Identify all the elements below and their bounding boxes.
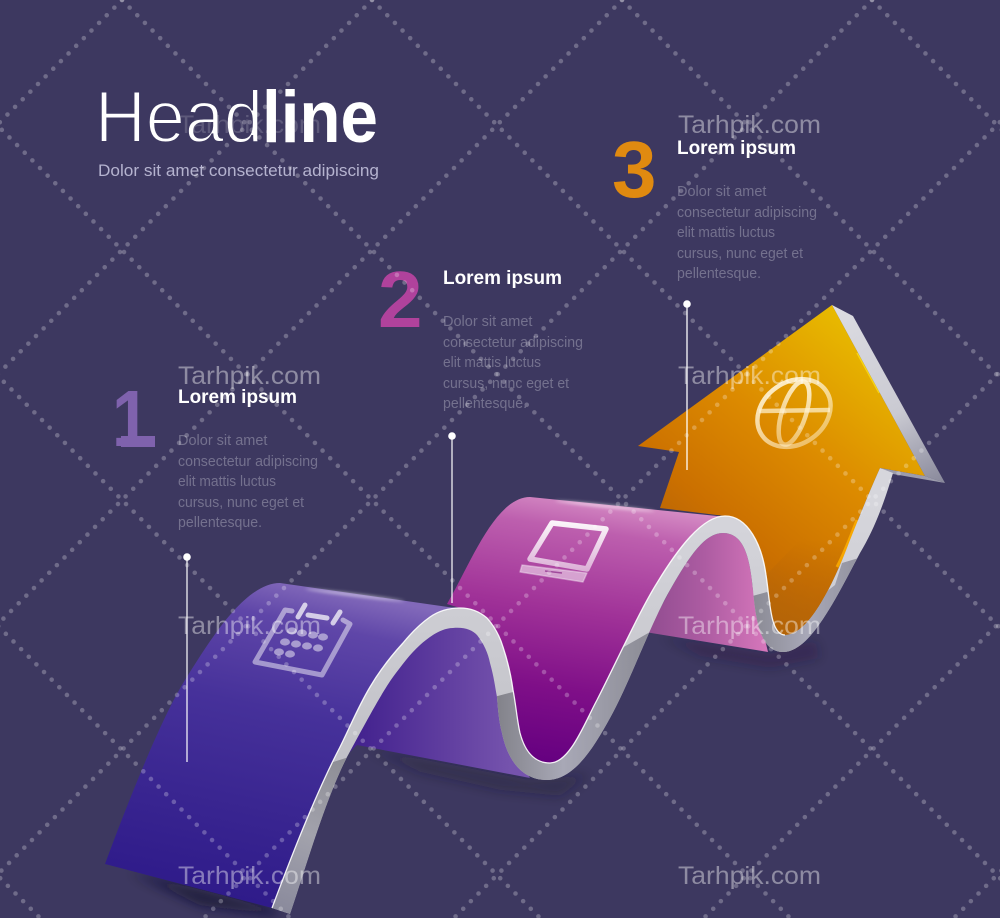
highlight on ribbon 1 [305,587,405,603]
step 1 body: Dolor sit amet [178,433,267,449]
title: Head [95,77,263,158]
step 2 body: elit mattis luctus [443,355,541,371]
leader line 1 [183,553,191,762]
number 1: 1 [112,374,150,463]
title: line [262,77,378,158]
panel: purple-magenta ribbon [447,497,725,763]
number 3: 3 [612,125,656,214]
watermarks: Tarhpik.com [678,362,821,390]
step 3 body: elit mattis luctus [677,225,775,241]
step 1 heading: Lorem ipsum [178,387,297,408]
step 3 heading: Lorem ipsum [677,138,796,159]
subtitle: Dolor sit amet consectetur adipiscing [98,161,379,180]
panel: blue ribbon [105,583,460,908]
number 2: 2 [378,255,422,344]
step 2 heading: Lorem ipsum [443,268,562,289]
step 1 text block [112,374,322,531]
silver ribbon edge [250,460,910,918]
step 1 body: consectetur adipiscing [178,454,318,470]
title [95,77,378,158]
step 3 body: cursus, nunc eget et [677,246,803,262]
step 2 text block [378,255,587,412]
icon: globe [744,365,844,461]
highlight on ribbon 2 [555,499,655,513]
step 2 body: cursus, nunc eget et [443,376,569,392]
step 3 body: consectetur adipiscing [677,205,817,221]
step 3 body: pellentesque. [677,266,761,282]
leader line 3 [683,300,691,470]
arrow head and shaft [638,305,945,635]
watermarks: Tarhpik.com [678,111,821,139]
watermarks: Tarhpik.com [678,612,821,640]
watermarks: Tarhpik.com [178,111,321,139]
step 2 body: pellentesque. [443,396,527,412]
icon: laptop [520,523,606,582]
step 1 body: elit mattis luctus [178,474,276,490]
watermarks: Tarhpik.com [178,862,321,890]
arrow silver edge [832,305,945,483]
step 1 body: pellentesque. [178,515,262,531]
purple underside of first wave [345,622,530,778]
step 3 text block [612,125,821,282]
icon: calendar [255,605,350,675]
ribbon shadows [130,636,820,916]
step 3 body: Dolor sit amet [677,184,766,200]
watermarks: Tarhpik.com [678,862,821,890]
step 2 body: consectetur adipiscing [443,335,583,351]
step 2 body: Dolor sit amet [443,314,532,330]
watermarks: Tarhpik.com [178,612,321,640]
step 1 body: cursus, nunc eget et [178,495,304,511]
watermarks: Tarhpik.com [178,362,321,390]
leader line 2 [448,432,456,603]
watermarks [178,111,821,890]
pink underside of second wave [628,533,768,670]
